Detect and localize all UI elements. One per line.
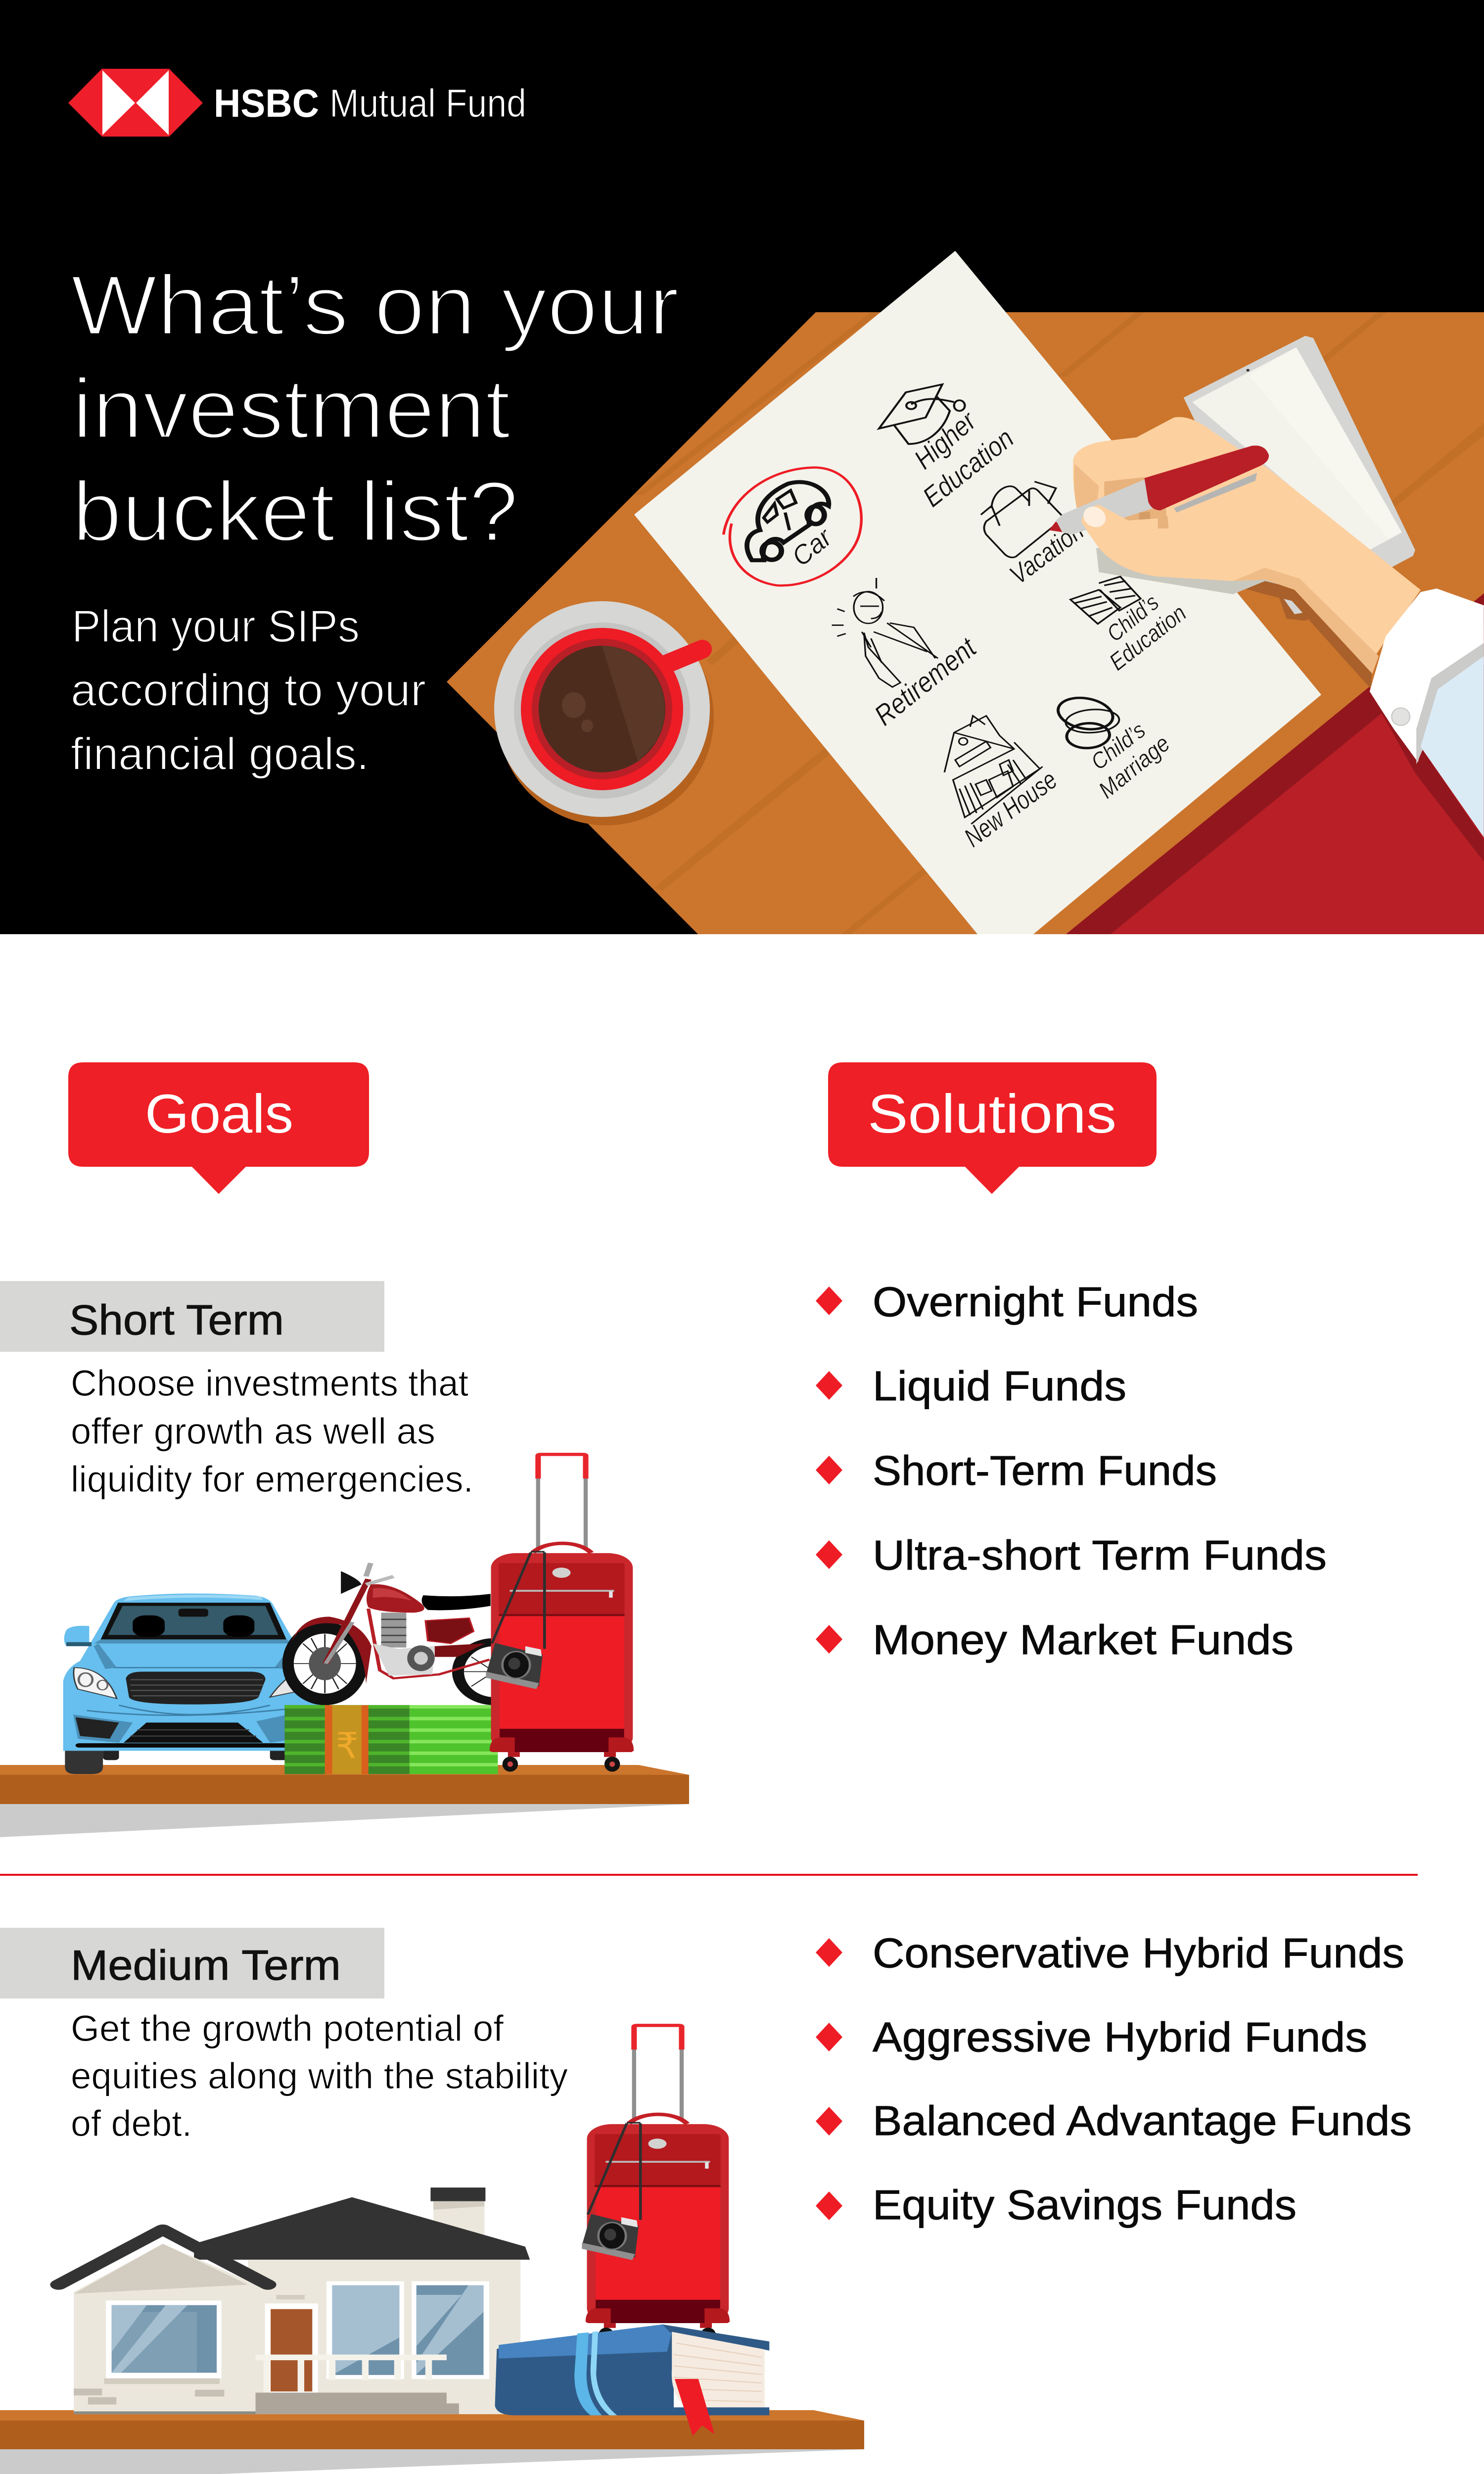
heading band: Medium Term [0, 1928, 384, 1998]
handwritten labels: Education [917, 422, 1020, 513]
heading band: Medium Term: Medium Term [71, 1942, 341, 1989]
illustration: blue car [63, 1593, 320, 1774]
list item: Ultra-short Term Funds: Ultra-short Term Funds [873, 1532, 1327, 1578]
handwritten labels: Retirement [868, 631, 983, 732]
subtitle [71, 601, 426, 779]
icon: circled car [724, 468, 861, 585]
handwritten labels: Child’s [1086, 717, 1150, 775]
icon: rupee symbol: ₹ [336, 1725, 359, 1766]
handwritten labels: Marriage [1094, 730, 1175, 804]
text: medium term description: Get the growth potential of [71, 2008, 504, 2049]
list item: Conservative Hybrid Funds: Conservative Hybrid Funds [873, 1930, 1404, 1976]
handwritten labels: Child’s [1102, 589, 1163, 647]
logo wordmark: Mutual Fund [329, 81, 526, 125]
list item: Money Market Funds: Money Market Funds [873, 1617, 1294, 1663]
list item: Aggressive Hybrid Funds: Aggressive Hybrid Funds [873, 2014, 1367, 2060]
subtitle: Plan your SIPs [72, 601, 360, 652]
shelf [0, 2410, 864, 2474]
list item: Balanced Advantage Funds: Balanced Advantage Funds [873, 2097, 1412, 2144]
illustration: motorbike [282, 1563, 536, 1705]
text: short term description [71, 1363, 473, 1500]
heading: Goals bubble [68, 1062, 369, 1194]
panel: Medium Term goal [0, 1928, 864, 2474]
icon: graduation cap [879, 384, 965, 444]
list item: Equity Savings Funds: Equity Savings Funds [873, 2182, 1297, 2228]
illustration: stack of rupee notes [284, 1705, 498, 1774]
panel: Short Term solutions list [816, 1279, 1327, 1663]
heading: Solutions bubble [828, 1062, 1157, 1194]
heading: Goals bubble: Goals [145, 1084, 293, 1144]
handwritten labels: Education [1105, 600, 1191, 676]
illustration: hand holding pen [1049, 417, 1421, 689]
illustration: tablet [1184, 336, 1415, 621]
handwritten labels: Higher [908, 404, 982, 475]
text: short term description: Choose investments that [71, 1363, 468, 1404]
list item: Liquid Funds: Liquid Funds [873, 1363, 1126, 1409]
shelf [0, 1765, 689, 1837]
subtitle: financial goals. [71, 729, 369, 779]
text: medium term description [71, 2008, 568, 2144]
illustration: wooden desk [447, 312, 1484, 934]
panel: Medium Term solutions list [816, 1930, 1412, 2228]
icon: suitcase [981, 481, 1064, 558]
illustration: coffee cup [494, 601, 714, 825]
panel: Short Term goal [0, 1281, 689, 1837]
illustration: suitcase with camera [582, 2025, 730, 2343]
title: bucket list? [72, 464, 518, 559]
handwritten labels: Vacation [1004, 516, 1089, 590]
logo wordmark: HSBC [214, 81, 319, 125]
title [71, 258, 679, 559]
logo: HSBC hexagon [68, 69, 203, 137]
title: investment [72, 361, 510, 456]
text: short term description: liquidity for emergencies. [71, 1459, 473, 1500]
panel: hero header [0, 0, 1484, 934]
icon: retired man [832, 578, 938, 687]
list item: Short-Term Funds: Short-Term Funds [873, 1447, 1217, 1494]
handwritten labels: New House [959, 765, 1063, 853]
text: short term description: offer growth as well as [71, 1411, 435, 1452]
text: medium term description: of debt. [71, 2103, 192, 2144]
handwritten labels: Car [786, 522, 838, 572]
handwritten labels [786, 404, 1191, 853]
subtitle: according to your [71, 665, 426, 715]
illustration: book [495, 2325, 769, 2436]
heading: Solutions bubble: Solutions [868, 1084, 1116, 1144]
heading band: Short Term: Short Term [69, 1297, 284, 1344]
text: medium term description: equities along with the stability [71, 2055, 568, 2096]
illustration: shirt cuff and sleeve [1370, 588, 1484, 861]
illustration: red suitcase with camera [486, 1454, 634, 1772]
icon: wedding rings [1054, 693, 1120, 750]
logo wordmark [214, 81, 526, 125]
illustration: bucket list paper [634, 251, 1321, 934]
illustration: red chair and shadow [1066, 593, 1484, 934]
title: What’s on your [71, 258, 679, 353]
icon: open book [1070, 576, 1141, 624]
list item: Overnight Funds: Overnight Funds [873, 1279, 1198, 1325]
icon: house [944, 716, 1043, 824]
heading band: Short Term [0, 1281, 384, 1352]
illustration: house [59, 2188, 530, 2414]
